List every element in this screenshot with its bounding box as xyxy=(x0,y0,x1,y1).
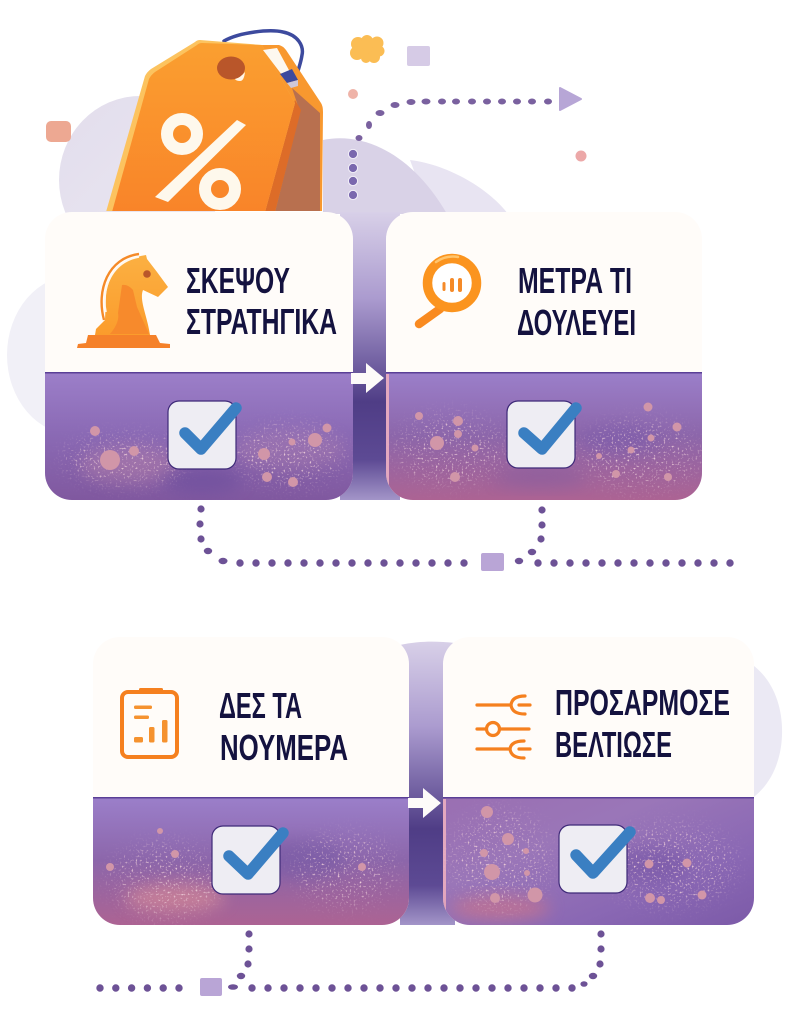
card 3: see the numbers xyxy=(93,637,409,925)
heading xyxy=(555,682,730,765)
connector square: lower xyxy=(200,978,222,996)
background blobs: bottom xyxy=(400,642,782,925)
card 2: measure what works xyxy=(386,212,702,500)
card 4: adjust and improve xyxy=(443,637,754,925)
tag front face xyxy=(106,40,295,212)
dotted path: bottom left row xyxy=(100,984,180,992)
background blobs: top xyxy=(7,96,508,500)
icon: sliders xyxy=(477,696,530,758)
heading xyxy=(186,260,337,342)
heading: ΜΕΤΡΑ ΤΙ xyxy=(518,260,632,301)
heading xyxy=(517,260,636,343)
arrow: card 1 to card 2 xyxy=(351,363,384,393)
decorative shape: pink square left xyxy=(46,121,71,142)
connector square: upper xyxy=(481,553,504,571)
dotted path: below card 4 xyxy=(252,930,605,988)
dotted path: below card 3 xyxy=(228,930,253,990)
decorative shape: pink dot right xyxy=(576,150,586,162)
heading: ΔΕΣ ΤΑ xyxy=(219,685,302,726)
checkbox xyxy=(168,401,236,469)
decorative shape: flower xyxy=(350,35,384,63)
tag back face xyxy=(260,45,323,212)
heading: ΔΟΥΛΕΥΕΙ xyxy=(517,302,636,343)
percent sign xyxy=(167,119,235,204)
heading: ΣΤΡΑΤΗΓΙΚΑ xyxy=(186,301,337,342)
dotted path: top with arrowhead xyxy=(348,88,581,200)
decorative shape: pink dot top xyxy=(348,89,358,99)
arrowhead xyxy=(560,88,581,110)
checkbox xyxy=(212,826,283,894)
tag string xyxy=(224,31,302,71)
heading: ΒΕΛΤΙΩΣΕ xyxy=(555,724,672,765)
card 1: think strategically xyxy=(45,212,353,500)
icon: magnifying glass with bars xyxy=(419,257,476,324)
heading: ΣΚΕΨΟΥ xyxy=(186,260,290,301)
icon: clipboard with chart xyxy=(122,688,177,757)
checkbox xyxy=(559,825,630,893)
tag hole xyxy=(217,56,245,80)
checkbox xyxy=(507,401,576,468)
arrow: card 3 to card 4 xyxy=(408,788,441,818)
white strip and clip xyxy=(263,48,290,75)
decorative shape: lavender square xyxy=(407,46,430,66)
price tag with percent sign xyxy=(106,31,323,212)
dotted path: below card 2 xyxy=(515,506,732,564)
heading: ΝΟΥΜΕΡΑ xyxy=(220,727,348,768)
icon: chess knight xyxy=(77,254,170,348)
dotted path: below card 1 xyxy=(196,505,466,564)
heading xyxy=(219,685,348,768)
